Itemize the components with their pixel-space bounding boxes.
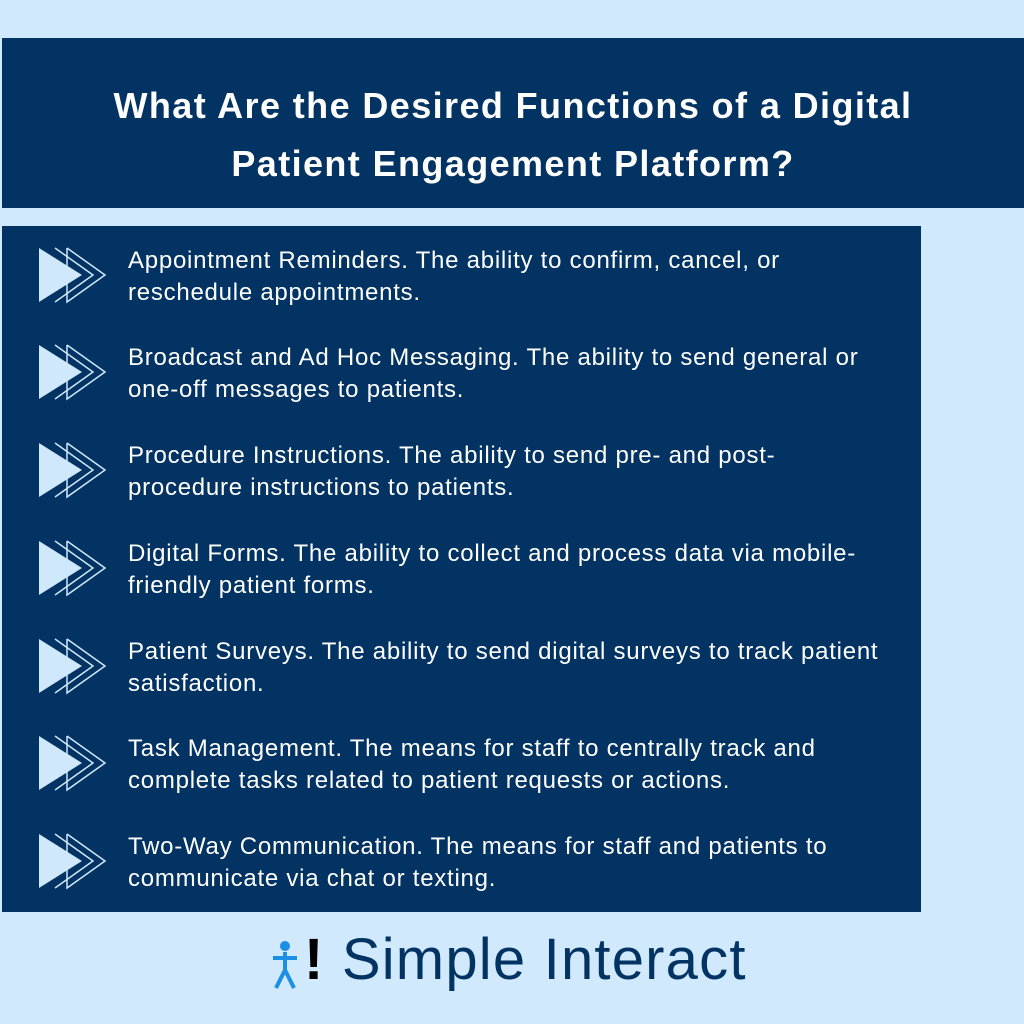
item: digital forms: friendly patient forms. xyxy=(128,572,375,599)
item: task management xyxy=(39,735,816,794)
item: patient surveys xyxy=(39,638,878,697)
item: broadcast messaging xyxy=(39,344,858,403)
logo xyxy=(273,927,747,992)
item: digital forms xyxy=(39,540,856,599)
item: procedure instructions: Procedure Instructions. The ability to send pre- and post- xyxy=(128,442,775,469)
item: broadcast messaging: Broadcast and Ad Hoc Messaging. The ability to send general or xyxy=(128,344,858,371)
item: digital forms: Digital Forms. The ability to collect and process data via mobile- xyxy=(128,540,856,567)
panel: functions list xyxy=(2,226,921,912)
item: appointment reminders: Appointment Reminders. The ability to confirm, cancel, or xyxy=(128,247,780,274)
item: broadcast messaging: one-off messages to patients. xyxy=(128,376,464,403)
item: appointment reminders xyxy=(39,247,780,306)
item: two-way communication: communicate via chat or texting. xyxy=(128,865,496,892)
item: two-way communication: Two-Way Communication. The means for staff and patients to xyxy=(128,833,827,860)
item: two-way communication xyxy=(39,833,827,892)
item: task management: complete tasks related to patient requests or actions. xyxy=(128,767,730,794)
item: appointment reminders: reschedule appointments. xyxy=(128,279,421,306)
icon: person xyxy=(273,941,297,989)
item: procedure instructions: procedure instructions to patients. xyxy=(128,474,514,501)
item: task management: Task Management. The means for staff to centrally track and xyxy=(128,735,816,762)
title xyxy=(2,38,1024,208)
title: Patient Engagement Platform? xyxy=(231,143,795,184)
logo text: ! Simple Interact xyxy=(304,927,747,992)
title: What Are the Desired Functions of a Digital xyxy=(114,85,912,126)
item: patient surveys: satisfaction. xyxy=(128,670,264,697)
item: patient surveys: Patient Surveys. The ability to send digital surveys to track patient xyxy=(128,638,878,665)
item: procedure instructions xyxy=(39,442,775,501)
